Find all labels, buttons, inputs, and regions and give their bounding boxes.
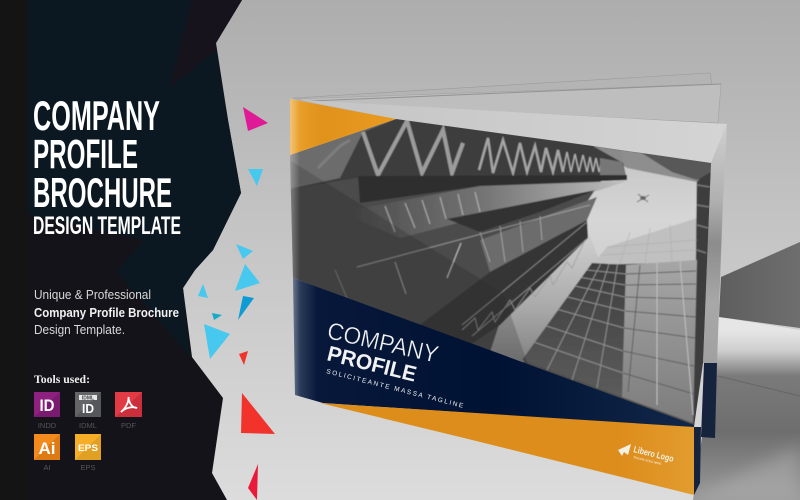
drone in the sky: [637, 194, 649, 202]
title: COMPANY: [33, 92, 160, 139]
brochure cover fold, right side: [703, 124, 727, 363]
cover title: SOLICITEANTE MASSA TAGLINE: [326, 368, 465, 410]
icon: PDF: [115, 392, 142, 430]
title: [33, 92, 181, 240]
title: BROCHURE: [33, 169, 172, 216]
cover title: [325, 318, 465, 410]
icon: AI: Ai: [38, 439, 56, 458]
dark strip at lower right of cover: [694, 427, 701, 495]
icon: EPS: [75, 434, 101, 472]
icon: IDML: [75, 392, 101, 430]
cover spine highlight: [290, 99, 300, 398]
icon: INDD: [34, 392, 60, 430]
dark building on the far right edge: [593, 146, 715, 430]
mid tower facade: [335, 197, 597, 305]
dark left panel: [0, 0, 242, 500]
steel beam: [358, 175, 627, 203]
far wall of the right tower: [592, 218, 697, 265]
cover title: COMPANY: [325, 318, 441, 369]
orange bottom band: [320, 403, 694, 495]
logo: [618, 444, 675, 466]
background: dark page wedge at right: [719, 242, 800, 328]
logo: TAGLINE GOES HERE: [633, 455, 662, 466]
cover title: PROFILE: [325, 342, 419, 387]
translucent dark triangle overlay: [280, 161, 530, 370]
icon: IDML: IDML: [82, 395, 94, 401]
description text: [34, 288, 179, 337]
brochure front page edge: [300, 100, 727, 163]
icon: EPS: EPS: [78, 443, 98, 454]
icon: AI: [34, 434, 60, 472]
lattice building: [420, 220, 588, 345]
logo: Libero Logo: [633, 444, 675, 464]
orange top corner: [290, 99, 396, 155]
icon: IDML: IDML: [79, 421, 97, 430]
title: DESIGN TEMPLATE: [33, 212, 181, 240]
cover photograph: skyscrapers looking up: [290, 119, 711, 427]
right tower dark windows: [522, 263, 626, 397]
decorative triangles: [198, 107, 275, 500]
glass facade band: [375, 181, 624, 238]
title: PROFILE: [33, 131, 138, 177]
description text: Company Profile Brochure: [34, 306, 179, 320]
upper truss building: [285, 119, 627, 190]
tools used heading: Tools used:: [34, 372, 90, 386]
icon: INDD: INDD: [38, 421, 57, 430]
brochure back pages: [293, 73, 721, 123]
sky: [568, 166, 698, 258]
description text: Unique & Professional: [34, 288, 151, 302]
icon: EPS: EPS: [80, 463, 96, 472]
description text: Design Template.: [34, 323, 125, 337]
clouds between the buildings: [490, 246, 598, 362]
icon: AI: AI: [43, 463, 51, 472]
navy band: [293, 278, 694, 428]
right tower light windows: [622, 224, 698, 424]
navy flap behind cover: [701, 363, 717, 438]
icon: INDD: ID: [40, 396, 54, 415]
icon: PDF: PDF: [121, 421, 136, 430]
background: floor and shadow behind the brochure: [693, 317, 800, 500]
icon: IDML: ID: [82, 401, 94, 416]
